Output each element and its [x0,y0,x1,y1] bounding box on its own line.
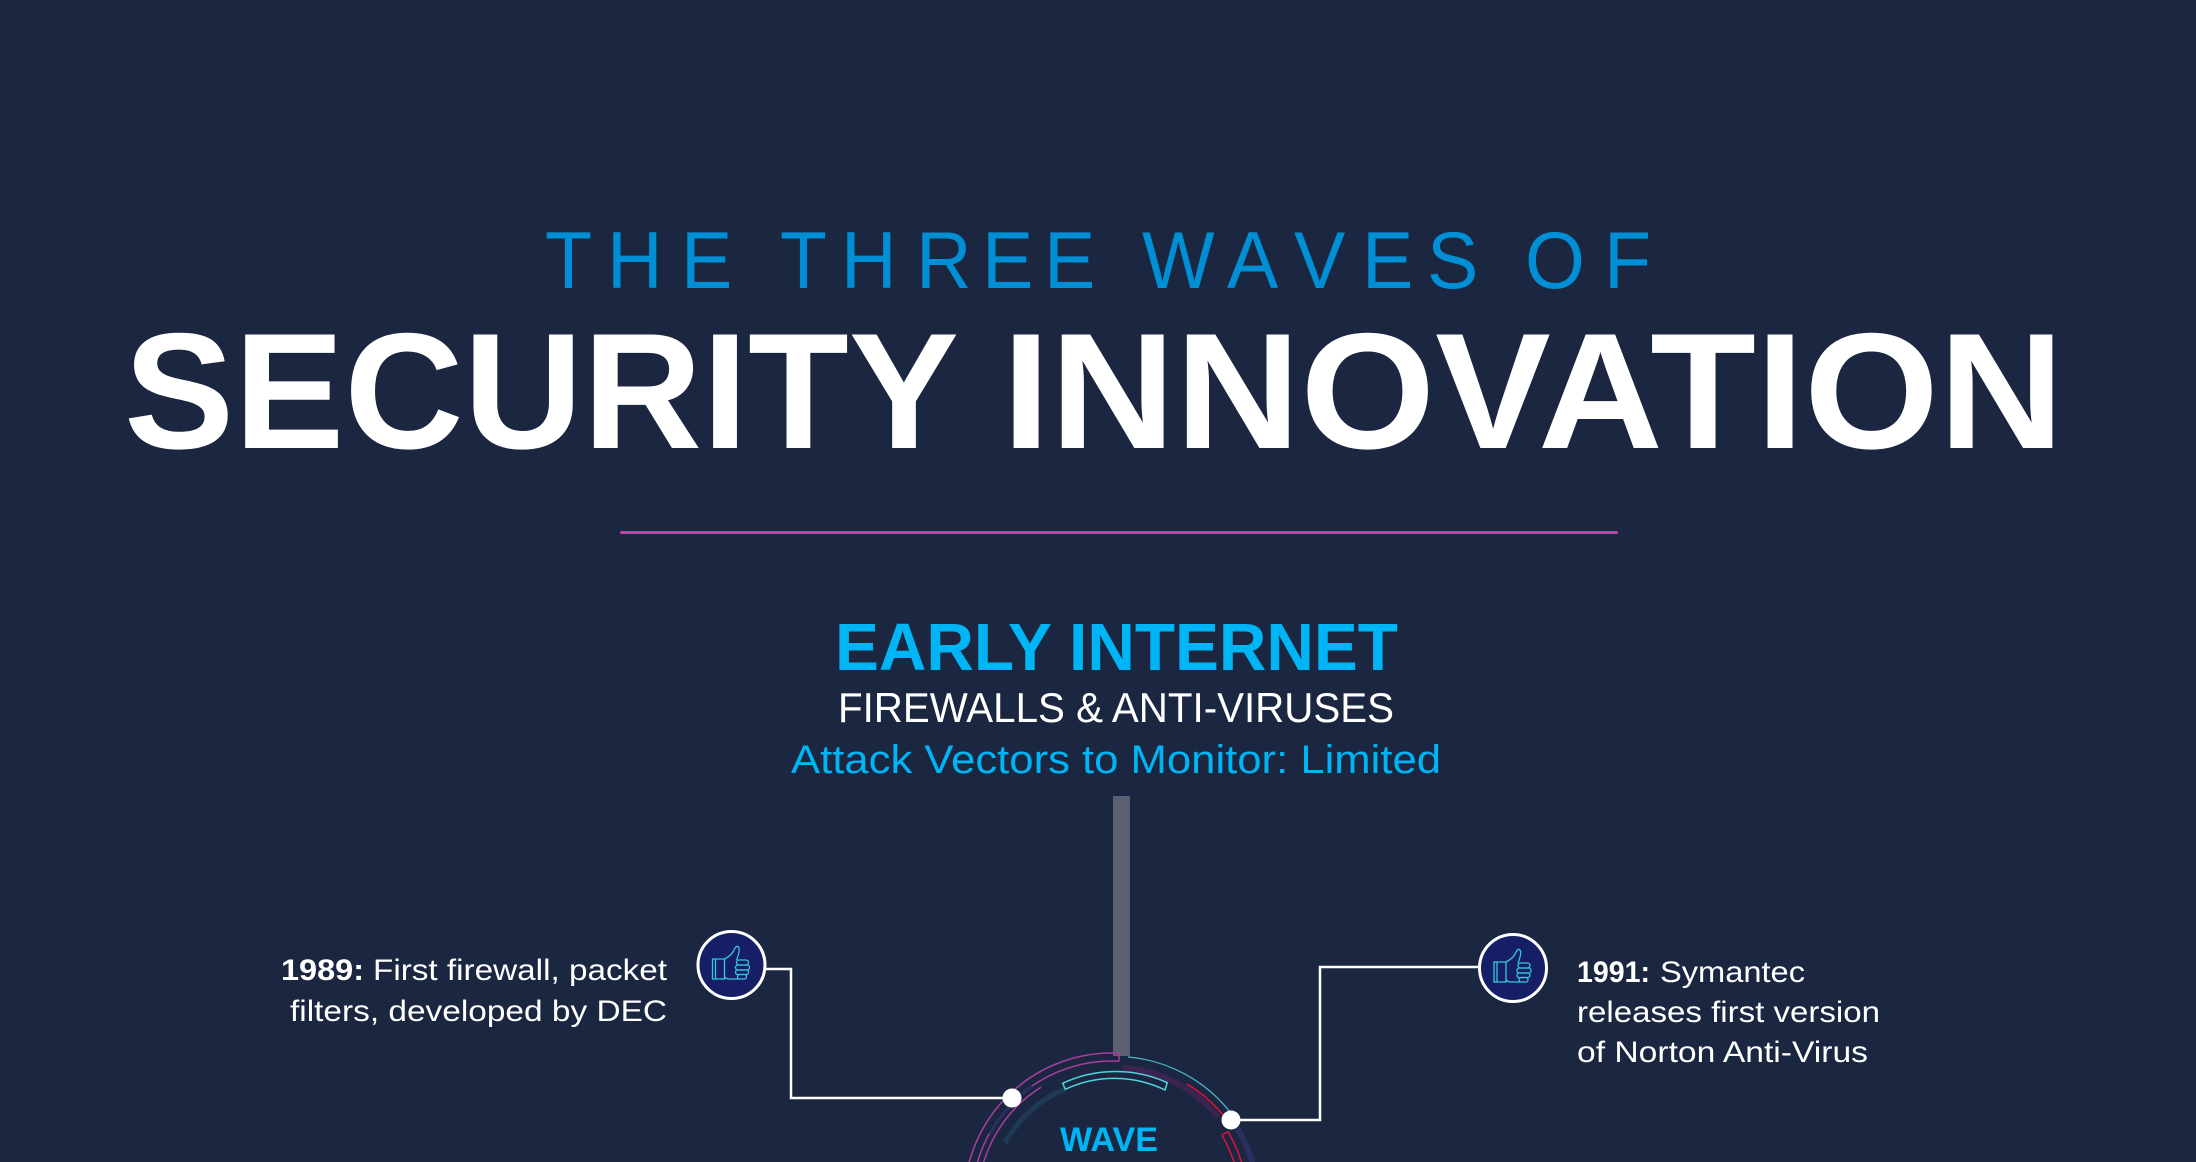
title: security innovation: INNOVATION [1002,299,2064,483]
text: 1989 event: 1989: [281,954,364,987]
heading: early internet: EARLY INTERNET [835,610,1398,685]
node: right [1222,1110,1240,1130]
text: 1989 event: filters, developed by DEC [290,995,667,1028]
text: attack vectors: Attack Vectors to Monitor: Limited [791,738,1441,782]
text: 1991 event: of Norton Anti-Virus [1577,1036,1868,1069]
text: 1991 event: releases first version [1577,996,1880,1029]
connector: left [766,969,1012,1098]
icon: thumbs up left [698,932,765,998]
text: 1991 event: 1991: [1577,956,1650,989]
wave label: WAVE [1060,1121,1158,1159]
title line: the three waves of: THE THREE WAVES OF [545,214,1651,305]
subheading: firewalls and anti-viruses: FIREWALLS & ANTI-VIRUSES [838,684,1394,731]
text: 1991 event: Symantec [1660,956,1805,989]
icon: thumbs up right [1480,934,1546,1002]
text: 1989 event [281,954,668,1028]
node: left [1002,1088,1022,1108]
title: security innovation [124,299,2064,483]
wave dial [964,1053,1258,1162]
timeline vertical bar [1113,796,1130,1056]
text: 1989 event: First firewall, packet [373,954,668,987]
text: 1991 event [1577,956,1880,1069]
title: security innovation: SECURITY [124,299,959,483]
connector: right [1231,967,1480,1120]
